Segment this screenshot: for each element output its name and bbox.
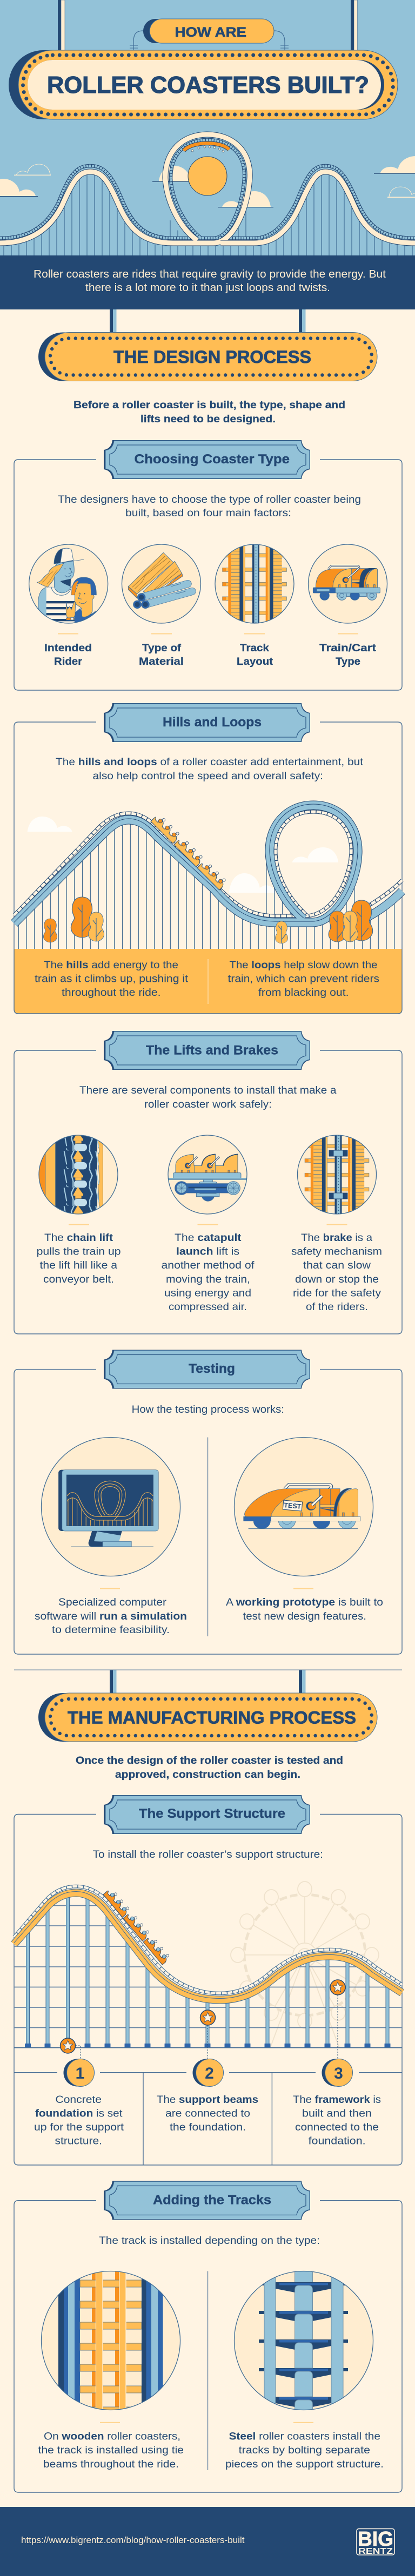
heading plaque: The Lifts and Brakes (146, 1043, 278, 1057)
captions: The hills add energy to the (44, 960, 178, 971)
step text 3 (293, 2094, 381, 2147)
step text 1: foundation is set (35, 2108, 123, 2119)
captions: of the riders. (306, 1302, 368, 1313)
yellow train (151, 813, 227, 890)
section banner: the design process (38, 333, 377, 381)
heading plaque (104, 1795, 310, 1834)
captions (37, 1224, 382, 1313)
captions: launch lift is (176, 1246, 239, 1257)
support framework (14, 1898, 402, 2048)
factor labels: Train/Cart (319, 643, 377, 654)
source url: https://www.bigrentz.com/blog/how-roller-coasters-built (21, 2535, 245, 2545)
panel intro: The designers have to choose the type of roller coaster being (58, 494, 361, 505)
ferris wheel (231, 1882, 379, 2048)
section poles: design (110, 309, 306, 333)
icon: computer simulation (41, 1438, 180, 1576)
step text 2: are connected to (165, 2108, 250, 2119)
icon: train cart (308, 544, 387, 623)
panel intro (58, 494, 361, 519)
panel intro: How the testing process works: (132, 1404, 284, 1415)
heading plaque: Hills and Loops (163, 715, 262, 730)
panel intro: also help control the speed and overall safety: (93, 771, 323, 782)
step text 2 (157, 2094, 258, 2133)
panel: hills and loops (14, 703, 402, 1014)
captions: the track is installed using tie (38, 2445, 184, 2456)
step text 2: the foundation. (170, 2122, 246, 2133)
panel: the lifts and brakes (14, 1031, 402, 1334)
section banner: the manufacturing process: THE MANUFACTURING PROCESS (68, 1708, 356, 1727)
step text 3: built and then (302, 2108, 372, 2119)
step badge 1 (64, 2059, 94, 2087)
supports (14, 820, 402, 949)
panel intro: There are several components to install that make a (79, 1085, 337, 1096)
captions: Steel roller coasters install the (229, 2431, 380, 2442)
captions: that can slow (303, 1260, 371, 1271)
intro band: there is a lot more to it than just loops and twists. (85, 282, 330, 294)
captions: down or stop the (295, 1274, 379, 1285)
captions: On wooden roller coasters, (44, 2431, 180, 2442)
logo: big rentz: BIG (358, 2528, 393, 2551)
factor labels: Type of (142, 643, 182, 654)
captions: from blacking out. (258, 987, 349, 999)
factor labels: Material (139, 656, 184, 667)
panel intro: built, based on four main factors: (125, 508, 291, 519)
test tag: TEST (284, 1501, 302, 1510)
design intro text: Before a roller coaster is built, the type, shape and (73, 400, 345, 411)
step text 1: structure. (55, 2135, 102, 2147)
icon: brake (297, 1135, 376, 1214)
heading plaque (104, 1031, 310, 1070)
intro band (0, 255, 415, 309)
step badge 3 (322, 2059, 352, 2087)
clouds (28, 817, 338, 893)
captions: tracks by bolting separate (239, 2445, 370, 2456)
manufacturing intro text: Once the design of the roller coaster is tested and (76, 1755, 343, 1766)
sun (188, 157, 227, 195)
heading plaque (104, 440, 310, 479)
step text 3: foundation. (309, 2135, 366, 2147)
heading plaque: Adding the Tracks (153, 2193, 271, 2208)
step badge 3: 3 (334, 2065, 343, 2082)
captions (35, 1588, 383, 1636)
captions: pulls the train up (37, 1246, 121, 1257)
section poles: manufacturing (110, 1670, 306, 1694)
captions: The brake is a (301, 1232, 372, 1244)
captions: throughout the ride. (62, 987, 161, 999)
captions: test new design features. (243, 1611, 366, 1622)
panel intro: The hills and loops of a roller coaster add entertainment, but (56, 757, 364, 768)
captions: software will run a simulation (35, 1611, 187, 1622)
section banner: the design process: THE DESIGN PROCESS (113, 347, 311, 367)
captions: A working prototype is built to (226, 1597, 383, 1608)
step badge 2: 2 (205, 2065, 214, 2082)
orange train (103, 1887, 171, 1965)
icon: chain lift (38, 1135, 118, 1215)
captions: Specialized computer (58, 1597, 167, 1608)
panel: testing (14, 1350, 402, 1654)
clouds (0, 156, 415, 207)
captions: another method of (161, 1260, 255, 1271)
icon: intended rider (29, 544, 108, 625)
captions: compressed air. (169, 1302, 247, 1313)
heading plaque (104, 1350, 310, 1389)
step text 3: The framework is (293, 2094, 381, 2106)
intro band: Roller coasters are rides that require gravity to provide the energy. But (34, 268, 386, 280)
heading plaque: The Support Structure (139, 1806, 285, 1821)
design intro text (73, 400, 345, 425)
captions: The loops help slow down the (229, 960, 377, 971)
sign: how are (130, 19, 289, 50)
captions: conveyor belt. (43, 1274, 114, 1285)
factor labels: Type (336, 656, 360, 667)
sign: roller coasters built: ROLLER COASTERS BUILT? (47, 72, 369, 98)
panel intro: To install the roller coaster’s support structure: (93, 1849, 323, 1860)
star marker 3 (330, 1980, 345, 1995)
captions: The chain lift (44, 1232, 113, 1244)
captions: pieces on the support structure. (225, 2459, 384, 2470)
factor labels: Rider (54, 656, 83, 667)
captions: using energy and (164, 1287, 251, 1299)
hero: sky scene with title sign (0, 0, 415, 255)
section banner: the manufacturing process (38, 1693, 377, 1742)
heading plaque (104, 703, 310, 742)
captions: ride for the safety (293, 1287, 381, 1299)
panel intro: The track is installed depending on the type: (99, 2235, 320, 2247)
factor labels (44, 633, 377, 667)
icon: type of material (122, 544, 201, 623)
coaster illustration (14, 804, 402, 949)
yellow caption area (14, 949, 402, 1014)
logo: big rentz: RENTZ (358, 2547, 393, 2556)
captions (35, 959, 379, 1004)
star marker 2 (200, 2010, 215, 2025)
step text 1 (34, 2094, 124, 2147)
icon: track layout (215, 544, 294, 623)
factor labels: Intended (44, 643, 92, 654)
step text 1: Concrete (55, 2094, 102, 2106)
hanging poles (58, 0, 358, 50)
captions: beams throughout the ride. (43, 2459, 179, 2470)
captions: the lift hill like a (40, 1260, 117, 1271)
callout leaders (76, 1995, 338, 2059)
heading plaque: Choosing Coaster Type (134, 452, 290, 467)
icon: wooden track (41, 2268, 180, 2414)
icon: steel track (235, 2268, 373, 2414)
steps grid lines (14, 2073, 402, 2165)
factor labels: Track (240, 643, 269, 654)
sign: how are: HOW ARE (175, 25, 246, 40)
captions: to determine feasibility. (52, 1624, 170, 1636)
step text 2: The support beams (157, 2094, 258, 2106)
factor labels: Layout (237, 656, 273, 667)
captions: train, which can prevent riders (228, 973, 379, 985)
panel: the support structure (14, 1795, 402, 2165)
panel: adding the tracks (14, 2181, 402, 2492)
trees (43, 897, 373, 943)
sky background (0, 0, 415, 255)
step text 3: connected to the (295, 2122, 379, 2133)
step badge 2 (192, 2059, 224, 2087)
coaster supports (0, 173, 415, 255)
track rails and ties (14, 804, 402, 923)
icon: catapult launch (168, 1135, 249, 1214)
star marker 1 (61, 2038, 76, 2053)
panel intro: roller coaster work safely: (144, 1099, 272, 1110)
sign: roller coasters built (9, 50, 398, 119)
captions (38, 2422, 384, 2470)
captions: The catapult (175, 1232, 242, 1244)
design intro text: lifts need to be designed. (140, 414, 276, 425)
icon: working prototype (235, 1438, 373, 1576)
panel intro (79, 1085, 337, 1110)
heading plaque (104, 2181, 310, 2220)
coaster track with loop (0, 134, 415, 243)
track (14, 1886, 402, 2000)
coaster train on loop (184, 143, 229, 152)
captions: moving the train, (166, 1274, 250, 1285)
step text 1: up for the support (34, 2122, 124, 2133)
manufacturing intro text: approved, construction can begin. (115, 1769, 300, 1781)
heading plaque: Testing (189, 1361, 235, 1376)
captions: train as it climbs up, pushing it (35, 973, 189, 985)
manufacturing intro text (76, 1755, 343, 1781)
step badge 1: 1 (76, 2065, 84, 2082)
panel intro (56, 757, 364, 782)
captions: safety mechanism (291, 1246, 382, 1257)
panel: choosing coaster type (14, 440, 402, 690)
footer (0, 2507, 415, 2576)
